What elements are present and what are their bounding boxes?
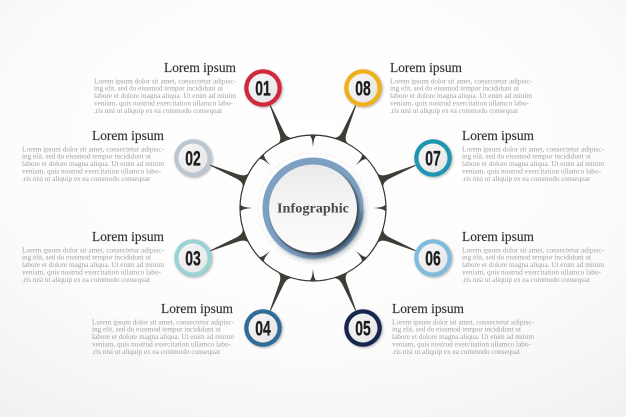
text block 05	[392, 301, 535, 356]
text block 08: ing elit, sed do eiusmod tempor incididunt ut	[390, 84, 519, 93]
text block 02: veniam, quis nostrud exercitation ullamco labo-	[22, 166, 162, 176]
text block 08: .ris nisi ut aliquip ex ea commodo consequat	[390, 106, 518, 115]
text block 05: Lorem ipsum	[392, 301, 464, 316]
center label: Infographic	[277, 202, 349, 216]
badge 07	[414, 139, 453, 178]
text block 05: veniam, quis nostrud exercitation ullamco labo-	[392, 340, 532, 348]
text block 01: .ris nisi ut aliquip ex ea commodo consequat	[94, 106, 222, 115]
text block 03	[22, 229, 165, 284]
badge 05	[344, 309, 383, 348]
badge 07: 07	[425, 148, 441, 170]
text block 07: Lorem ipsum	[462, 128, 534, 143]
text block 01: Lorem ipsum dolor sit amet, consectetur adipisc-	[94, 76, 237, 85]
badge 06: 06	[425, 248, 441, 270]
text block 03: veniam, quis nostrud exercitation ullamco labo-	[22, 268, 162, 276]
text block 03: ing elit, sed do eiusmod tempor incididunt ut	[22, 253, 151, 262]
text block 04: ing elit, sed do eiusmod tempor incididunt ut	[92, 325, 221, 334]
text block 02: labore et dolore magna aliqua. Ut enim ad minim	[22, 159, 164, 168]
text block 08: Lorem ipsum dolor sit amet, consectetur adipisc-	[390, 76, 533, 85]
text block 03: Lorem ipsum dolor sit amet, consectetur adipisc-	[22, 245, 165, 254]
text block 08: labore et dolore magna aliqua. Ut enim ad minim	[390, 91, 532, 100]
text block 02: .ris nisi ut aliquip ex ea commodo consequat	[22, 174, 150, 183]
text block 05: ing elit, sed do eiusmod tempor incididunt ut	[392, 325, 521, 334]
badge 02: 02	[185, 148, 201, 170]
text block 04: Lorem ipsum	[161, 301, 233, 316]
text block 01: ing elit, sed do eiusmod tempor incididunt ut	[94, 84, 223, 93]
text block 08: veniam, quis nostrud exercitation ullamco labo-	[390, 98, 530, 108]
text block 07: veniam, quis nostrud exercitation ullamco labo-	[462, 166, 602, 176]
badge 04	[244, 309, 283, 348]
text block 07: .ris nisi ut aliquip ex ea commodo consequat	[462, 174, 590, 183]
text block 06: veniam, quis nostrud exercitation ullamco labo-	[462, 268, 602, 276]
blue ring	[262, 158, 364, 260]
text block 07: ing elit, sed do eiusmod tempor incididunt ut	[462, 152, 591, 161]
badge 06	[414, 239, 453, 278]
text block 08: Lorem ipsum	[390, 60, 462, 75]
text block 06	[462, 229, 605, 284]
text block 02	[22, 128, 165, 183]
text block 02: Lorem ipsum	[92, 128, 164, 143]
badge 02	[174, 139, 213, 178]
text block 01: Lorem ipsum	[164, 60, 236, 75]
text block 06: Lorem ipsum	[462, 229, 534, 244]
text block 04: Lorem ipsum dolor sit amet, consectetur adipisc-	[92, 317, 235, 326]
text block 07: labore et dolore magna aliqua. Ut enim ad minim	[462, 159, 604, 168]
text block 05: .ris nisi ut aliquip ex ea commodo consequat	[392, 347, 520, 356]
text block 05: Lorem ipsum dolor sit amet, consectetur adipisc-	[392, 317, 535, 326]
text block 03: labore et dolore magna aliqua. Ut enim ad minim	[22, 260, 164, 269]
text block 01: veniam, quis nostrud exercitation ullamco labo-	[94, 98, 234, 108]
text block 05: labore et dolore magna aliqua. Ut enim ad minim	[392, 332, 534, 341]
text block 03: .ris nisi ut aliquip ex ea commodo consequat	[22, 275, 150, 284]
badge 03	[174, 239, 213, 278]
badge 05: 05	[355, 318, 371, 340]
text block 07: Lorem ipsum dolor sit amet, consectetur adipisc-	[462, 144, 605, 153]
badge 03: 03	[185, 248, 201, 270]
text block 06: .ris nisi ut aliquip ex ea commodo consequat	[462, 275, 590, 284]
badge 08	[344, 69, 383, 108]
text block 04	[92, 301, 235, 356]
badge 01: 01	[255, 78, 271, 100]
badge 01	[244, 69, 283, 108]
badge 08: 08	[355, 78, 371, 100]
text block 02: Lorem ipsum dolor sit amet, consectetur adipisc-	[22, 144, 165, 153]
text block 08	[390, 60, 533, 115]
text block 06: Lorem ipsum dolor sit amet, consectetur adipisc-	[462, 245, 605, 254]
text block 06: labore et dolore magna aliqua. Ut enim ad minim	[462, 260, 604, 269]
text block 04: veniam, quis nostrud exercitation ullamco labo-	[92, 340, 232, 348]
badge 04: 04	[255, 318, 271, 340]
text block 01: labore et dolore magna aliqua. Ut enim ad minim	[94, 91, 236, 100]
text block 01	[94, 60, 237, 115]
central hub diagram	[208, 103, 418, 313]
text block 02: ing elit, sed do eiusmod tempor incididunt ut	[22, 152, 151, 161]
text block 04: .ris nisi ut aliquip ex ea commodo consequat	[92, 347, 220, 356]
text block 04: labore et dolore magna aliqua. Ut enim ad minim	[92, 332, 234, 341]
text block 07	[462, 128, 605, 183]
text block 06: ing elit, sed do eiusmod tempor incididunt ut	[462, 253, 591, 262]
central disc	[269, 164, 360, 256]
outer ring with spokes	[208, 103, 418, 313]
text block 03: Lorem ipsum	[92, 229, 164, 244]
